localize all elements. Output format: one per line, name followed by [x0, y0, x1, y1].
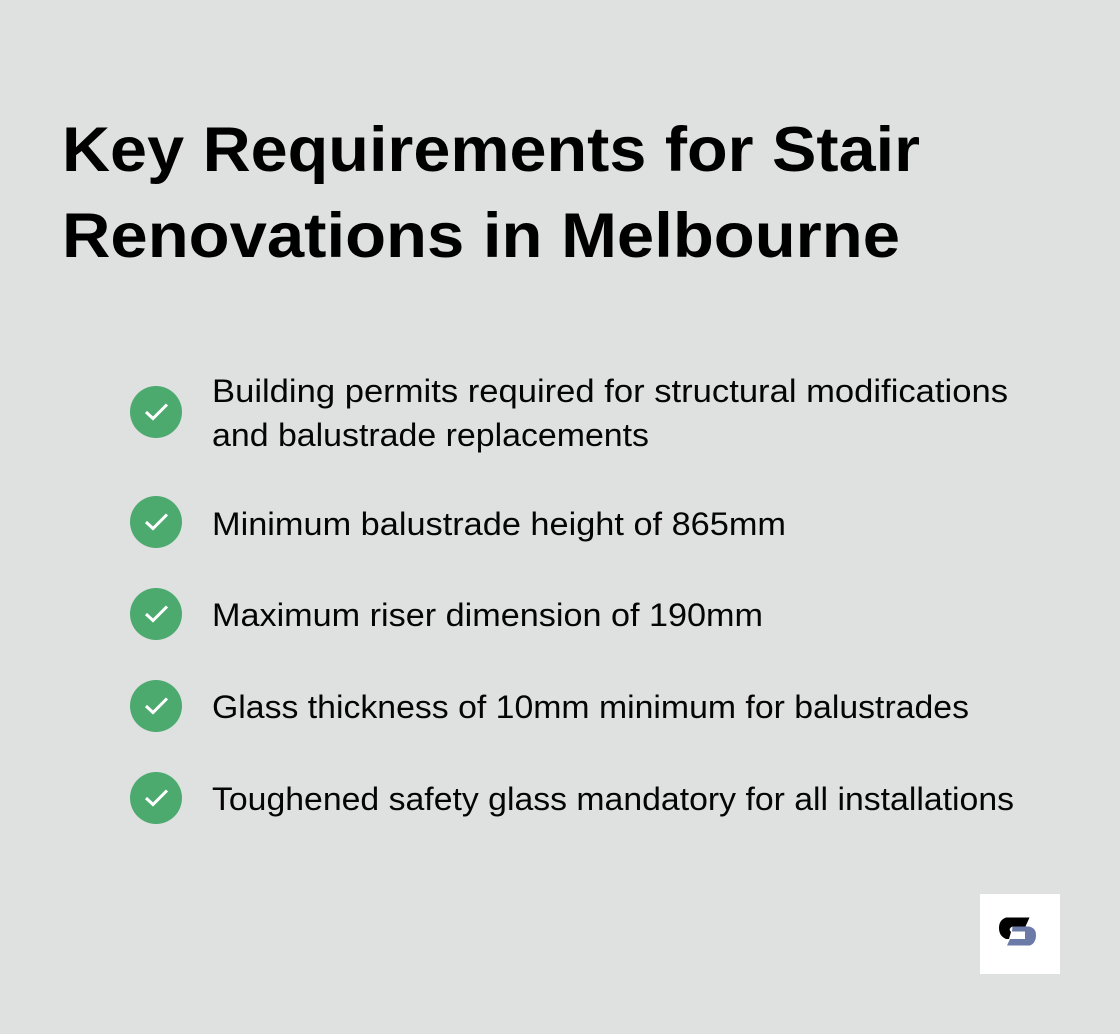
- title: [62, 115, 920, 271]
- item: balustrade height: Minimum balustrade height of 865mm: [212, 506, 786, 542]
- item: toughened glass: Toughened safety glass mandatory for all installations: [212, 781, 1014, 817]
- item: riser dimension: Maximum riser dimension of 190mm: [212, 597, 763, 633]
- item: glass thickness: [130, 680, 969, 732]
- item: riser dimension: [130, 588, 763, 640]
- item: building permits: and balustrade replacements: [212, 417, 649, 453]
- title: Renovations in Melbourne: [62, 201, 900, 271]
- item: building permits: [130, 373, 1008, 453]
- title: Key Requirements for Stair: [62, 115, 920, 185]
- item: glass thickness: Glass thickness of 10mm minimum for balustrades: [212, 689, 969, 725]
- item: building permits: Building permits required for structural modifications: [212, 373, 1008, 409]
- item: balustrade height: [130, 496, 786, 548]
- logo: [980, 894, 1060, 974]
- item: toughened glass: [130, 772, 1014, 824]
- checklist: [130, 373, 1014, 824]
